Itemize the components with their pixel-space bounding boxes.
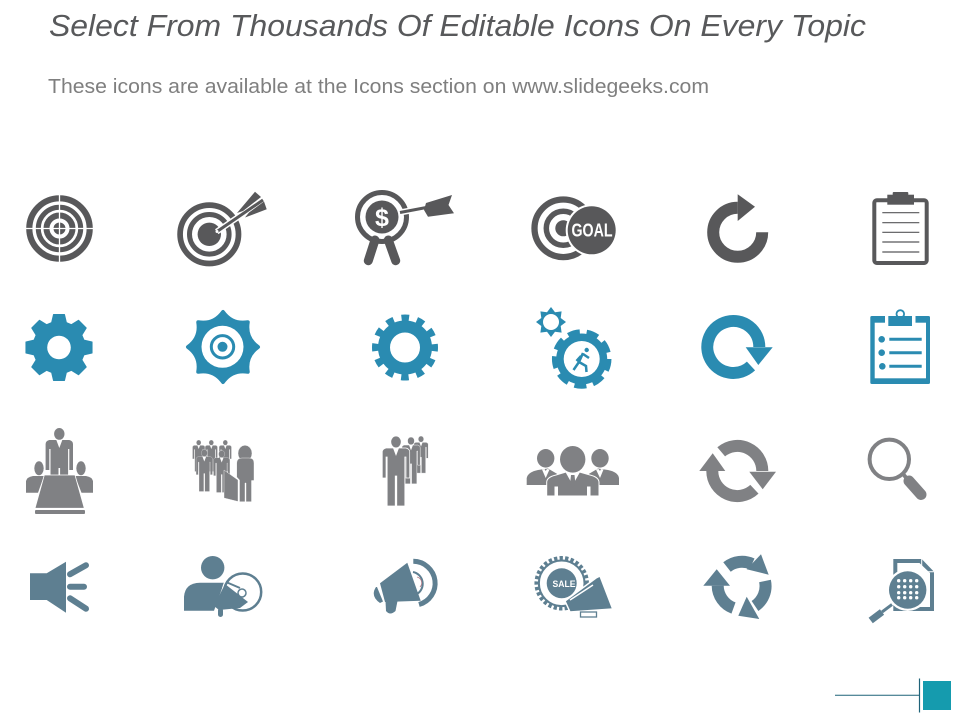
icon: refresh arrow bbox=[707, 321, 773, 373]
icon: cog wheel bbox=[376, 318, 434, 377]
icon: crosshair target bbox=[25, 194, 94, 263]
icon: team with presenter bbox=[193, 440, 254, 502]
icon: goal badge bbox=[534, 200, 618, 257]
icon: person with megaphone bbox=[184, 556, 264, 617]
icon: sale badge with megaphone bbox=[537, 558, 613, 617]
icon: checklist clipboard bbox=[870, 310, 930, 384]
icon: magnifying glass bbox=[870, 440, 921, 494]
icon: dollar target with dart: $ bbox=[375, 204, 389, 232]
icon: target with arrow bbox=[180, 192, 267, 264]
icon: megaphone with sound arcs bbox=[374, 561, 435, 614]
title: Select From Thousands Of Editable Icons On Every Topic bbox=[49, 8, 867, 43]
icon: boardroom meeting bbox=[26, 428, 93, 514]
icon: three executives bbox=[527, 446, 619, 496]
icon: gear with target bbox=[188, 312, 258, 382]
icon: sale badge with megaphone: SALE bbox=[552, 579, 576, 589]
icon: notes clipboard bbox=[874, 192, 927, 263]
footer accent: line and teal square bbox=[835, 678, 951, 712]
icon: business people line bbox=[382, 436, 428, 506]
icon: document under magnifier bbox=[871, 559, 934, 620]
icon: dollar target with dart bbox=[358, 192, 454, 261]
icon: reload two arrows bbox=[699, 446, 776, 496]
icon: gears with walking figure bbox=[536, 307, 609, 386]
icon: gear with hole bbox=[26, 314, 92, 381]
subtitle: These icons are available at the Icons section on www.slidegeeks.com bbox=[48, 76, 709, 98]
icon: recycle three arrows bbox=[703, 554, 769, 619]
icon: redo arrow bbox=[713, 194, 762, 257]
icon: goal badge: GOAL bbox=[572, 220, 613, 240]
icon: speaker bbox=[30, 562, 86, 613]
